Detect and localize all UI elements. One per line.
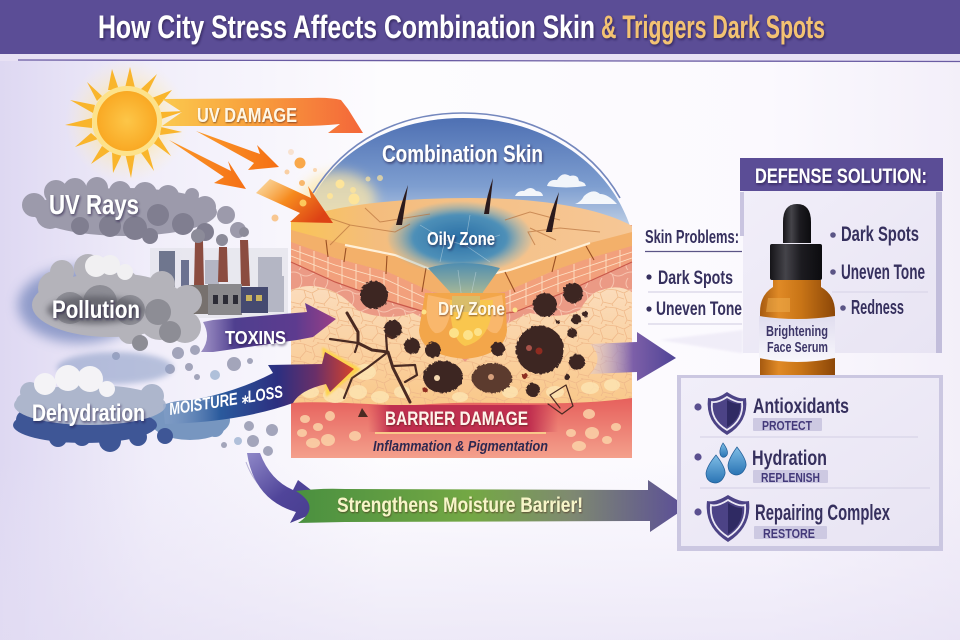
Dry zone: [419, 293, 518, 359]
panel: defense solution: [660, 158, 943, 353]
list: benefits: [830, 223, 928, 319]
smoke puffs rising from chimneys: [191, 227, 249, 246]
ingredient: repairing complex: RESTORE: [763, 527, 815, 541]
label: UV damage: UV DAMAGE: [197, 105, 297, 127]
heading: skin problems: Skin Problems:: [645, 227, 739, 247]
list item: uneven tone: Uneven Tone: [656, 299, 742, 320]
arrow: moisture loss: [163, 347, 361, 424]
panel: key ingredients: [677, 375, 943, 551]
ingredient: antioxidants: [694, 392, 849, 435]
label: strengthens moisture barrier: Strengthens Moisture Barrier!: [337, 494, 583, 517]
icon: shield: [707, 495, 749, 542]
title: gold part: & Triggers Dark Spots: [601, 9, 825, 45]
label: Brightening: [766, 324, 828, 340]
heading: defense solution: [740, 158, 943, 191]
label: UV Rays: UV Rays: [49, 189, 139, 220]
ingredient: hydration: [694, 443, 828, 485]
Barrier damage banner: BARRIER DAMAGE: [385, 409, 528, 430]
dropper bulb: [783, 204, 811, 243]
cloud: Dehydration: [13, 352, 230, 452]
dome sky: [300, 113, 632, 232]
list item: dark spots: Dark Spots: [658, 268, 733, 289]
label: moisture loss: MOISTURE ⁎LOSS: [168, 382, 285, 419]
dark spot highlights: [434, 345, 542, 381]
arrow: strengthens moisture barrier: [296, 480, 687, 532]
arrow: heat into skin: [256, 179, 333, 223]
label: toxins: TOXINS: [225, 328, 286, 348]
arrow: UV damage: [162, 98, 363, 133]
hairs: [396, 178, 559, 232]
list: benefits: Dark Spots: [841, 223, 919, 246]
decorative grey particles: [112, 345, 278, 456]
cap: [770, 244, 822, 280]
Dry zone: Dry Zone: [438, 299, 505, 319]
label: [759, 316, 835, 362]
decorative heat particles: [272, 149, 317, 222]
ingredient: repairing complex: [694, 495, 891, 542]
skin cells highlights: [301, 364, 620, 403]
front rim with brick layers: [291, 230, 632, 315]
title: white part: How City Stress Affects Combination Skin: [98, 9, 595, 45]
icon: shield: [708, 392, 746, 435]
arrow: sun ray lower 1: [196, 131, 279, 170]
icon: sun: [65, 59, 189, 183]
cloud: Pollution: [18, 254, 202, 351]
ingredient: antioxidants: PROTECT: [762, 419, 812, 433]
label: Pollution: Pollution: [52, 296, 140, 324]
arrow: curved down to barrier strength: [246, 453, 332, 523]
arrow: sun ray lower 2: [169, 140, 246, 189]
ingredient: hydration: REPLENISH: [761, 471, 820, 485]
serum bottle: [759, 204, 835, 375]
amber bottle: [760, 280, 835, 375]
Barrier damage banner: [368, 405, 558, 433]
skin surface cracks: [320, 208, 600, 245]
label: Face Serum: [767, 340, 828, 356]
top skin surface: [291, 198, 632, 296]
title banner: [0, 0, 960, 62]
bottle highlight: [766, 298, 790, 312]
skin base and layers: [291, 225, 632, 458]
ingredient: antioxidants: Antioxidants: [753, 395, 849, 418]
list: benefits: Redness: [851, 297, 904, 319]
subcaption: Inflammation & Pigmentation: [373, 438, 548, 455]
icon: water drops: [706, 443, 746, 483]
panel: skin problems: [645, 227, 742, 324]
skin cross-section diagram: [291, 113, 632, 458]
dome heading: Combination Skin: [382, 141, 543, 168]
dark spots: [360, 281, 588, 397]
band cells: [297, 409, 621, 451]
ingredient: repairing complex: Repairing Complex: [755, 500, 891, 525]
Oily zone: [388, 202, 532, 312]
illustration: factory skyline: [150, 240, 288, 318]
cloud: UV rays smoke: [22, 177, 246, 244]
ingredient: hydration: Hydration: [752, 447, 827, 470]
arrow: skin to solution: [590, 332, 676, 381]
label: Dehydration: Dehydration: [32, 400, 145, 427]
arrow: toxins: [201, 303, 336, 352]
barrier cracks: [330, 313, 573, 414]
Oily zone: Oily Zone: [427, 229, 495, 249]
